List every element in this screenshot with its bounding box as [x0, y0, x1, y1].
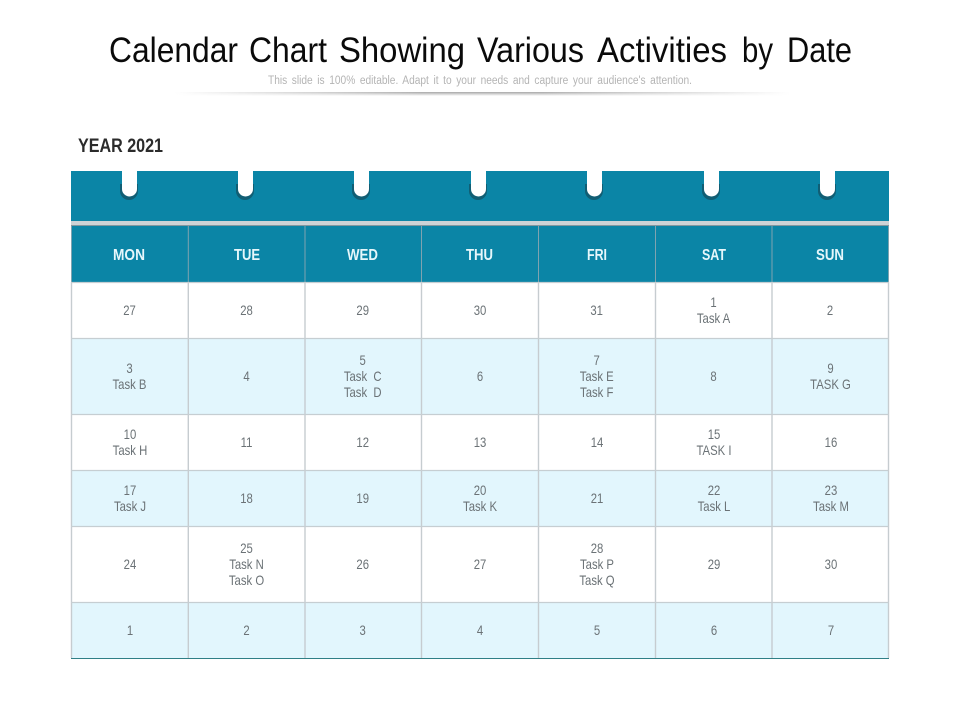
subtitle underline shadow [175, 92, 790, 96]
title: Activities [597, 31, 727, 70]
week 6 dates: 4 [477, 622, 483, 638]
week 6 dates: 7 [828, 622, 834, 638]
week 5 dates: 27 [474, 556, 486, 572]
week 1 dates: 31 [590, 302, 603, 318]
week 3 dates: 12 [356, 434, 369, 450]
week 3 dates: 16 [825, 434, 837, 450]
week 5 dates: 26 [356, 556, 369, 572]
binding tab 3 [352, 171, 370, 200]
week 2 dates: Task F [580, 384, 614, 400]
week 1 dates: 30 [474, 302, 486, 318]
week 3 dates: 10 [124, 426, 136, 442]
week 4 dates: Task L [698, 498, 730, 514]
week 2 dates: 6 [477, 368, 483, 384]
week 4 dates: 17 [124, 482, 136, 498]
title: by [742, 31, 773, 70]
title: Showing [339, 31, 465, 70]
binding tab 5 [585, 171, 603, 200]
week 2 dates: 9 [827, 360, 834, 376]
week 6 dates: 2 [243, 622, 250, 638]
week 4 dates [114, 482, 849, 514]
week 4 dates: Task J [114, 498, 146, 514]
week 3 dates: 13 [474, 434, 486, 450]
week 3 dates: 11 [241, 434, 252, 450]
week 1 dates: 29 [356, 302, 369, 318]
week 4 dates: 20 [474, 482, 486, 498]
week 3 dates: TASK I [696, 442, 732, 458]
week 1 dates [123, 294, 833, 326]
header row: MON [113, 247, 145, 264]
week 6 dates [127, 622, 834, 638]
week 1 dates: 27 [123, 302, 136, 318]
calendar table [71, 226, 889, 658]
header row: TUE [234, 247, 260, 264]
week 1 dates: 2 [827, 302, 833, 318]
week 5 dates: Task Q [579, 572, 615, 588]
week 5 dates: 29 [708, 556, 720, 572]
header row: FRI [587, 247, 607, 264]
week 4 dates: 23 [825, 482, 837, 498]
header row: SUN [816, 247, 844, 264]
week 4 dates: 21 [591, 490, 603, 506]
subtitle: This slide is 100% editable. Adapt it to your needs and capture your audience's attention. [268, 75, 692, 87]
week 1 dates: Task A [697, 310, 731, 326]
week 2 dates [113, 352, 851, 400]
week 2 dates: 7 [594, 352, 600, 368]
binding tab 7 [818, 171, 836, 200]
week 4 dates: 19 [356, 490, 369, 506]
title: Date [787, 31, 852, 70]
week 6 dates: 3 [360, 622, 366, 638]
binding tab 4 [469, 171, 487, 200]
week 2 dates: 5 [360, 352, 366, 368]
week 2 dates: 8 [710, 368, 717, 384]
binding tab 6 [702, 171, 720, 200]
week 4 dates: Task K [463, 498, 497, 514]
week 2 dates: Task B [113, 376, 146, 392]
week 2 dates: 4 [243, 368, 250, 384]
header row: SAT [702, 247, 726, 264]
calendar binding band with tabs [71, 171, 889, 225]
week 3 dates: 15 [708, 426, 720, 442]
week 5 dates: Task P [580, 556, 614, 572]
week 6 dates: 6 [711, 622, 717, 638]
week 6 dates: 1 [127, 622, 133, 638]
week 2 dates: TASK G [810, 376, 851, 392]
header row: WED [347, 247, 378, 264]
week 5 dates: 30 [825, 556, 837, 572]
binding tab 2 [236, 171, 254, 200]
week 2 dates: 3 [126, 360, 133, 376]
week 5 dates: 28 [591, 540, 603, 556]
binding tab 1 [120, 171, 138, 200]
week 2 dates: Task E [580, 368, 614, 384]
week 5 dates: Task N [229, 556, 264, 572]
week 5 dates [124, 540, 837, 588]
week 3 dates: Task H [113, 442, 147, 458]
title: Chart [249, 31, 327, 70]
week 6 dates: 5 [594, 622, 600, 638]
title: Various [477, 31, 584, 70]
title [109, 31, 852, 70]
week 5 dates: 24 [124, 556, 136, 572]
week 4 dates: 22 [708, 482, 720, 498]
header row [71, 226, 889, 282]
week 4 dates: Task M [813, 498, 849, 514]
row stripes [71, 338, 889, 658]
week 5 dates: 25 [240, 540, 253, 556]
title: Calendar [109, 31, 238, 70]
week 5 dates: Task O [229, 572, 264, 588]
header row: THU [466, 247, 493, 264]
week 2 dates: Task D [344, 384, 382, 400]
week 2 dates: Task C [344, 368, 382, 384]
week 1 dates: 1 [710, 294, 717, 310]
week 3 dates: 14 [591, 434, 603, 450]
year label: YEAR 2021 [78, 136, 163, 157]
week 4 dates: 18 [240, 490, 253, 506]
week 1 dates: 28 [240, 302, 253, 318]
week 3 dates [113, 426, 837, 458]
